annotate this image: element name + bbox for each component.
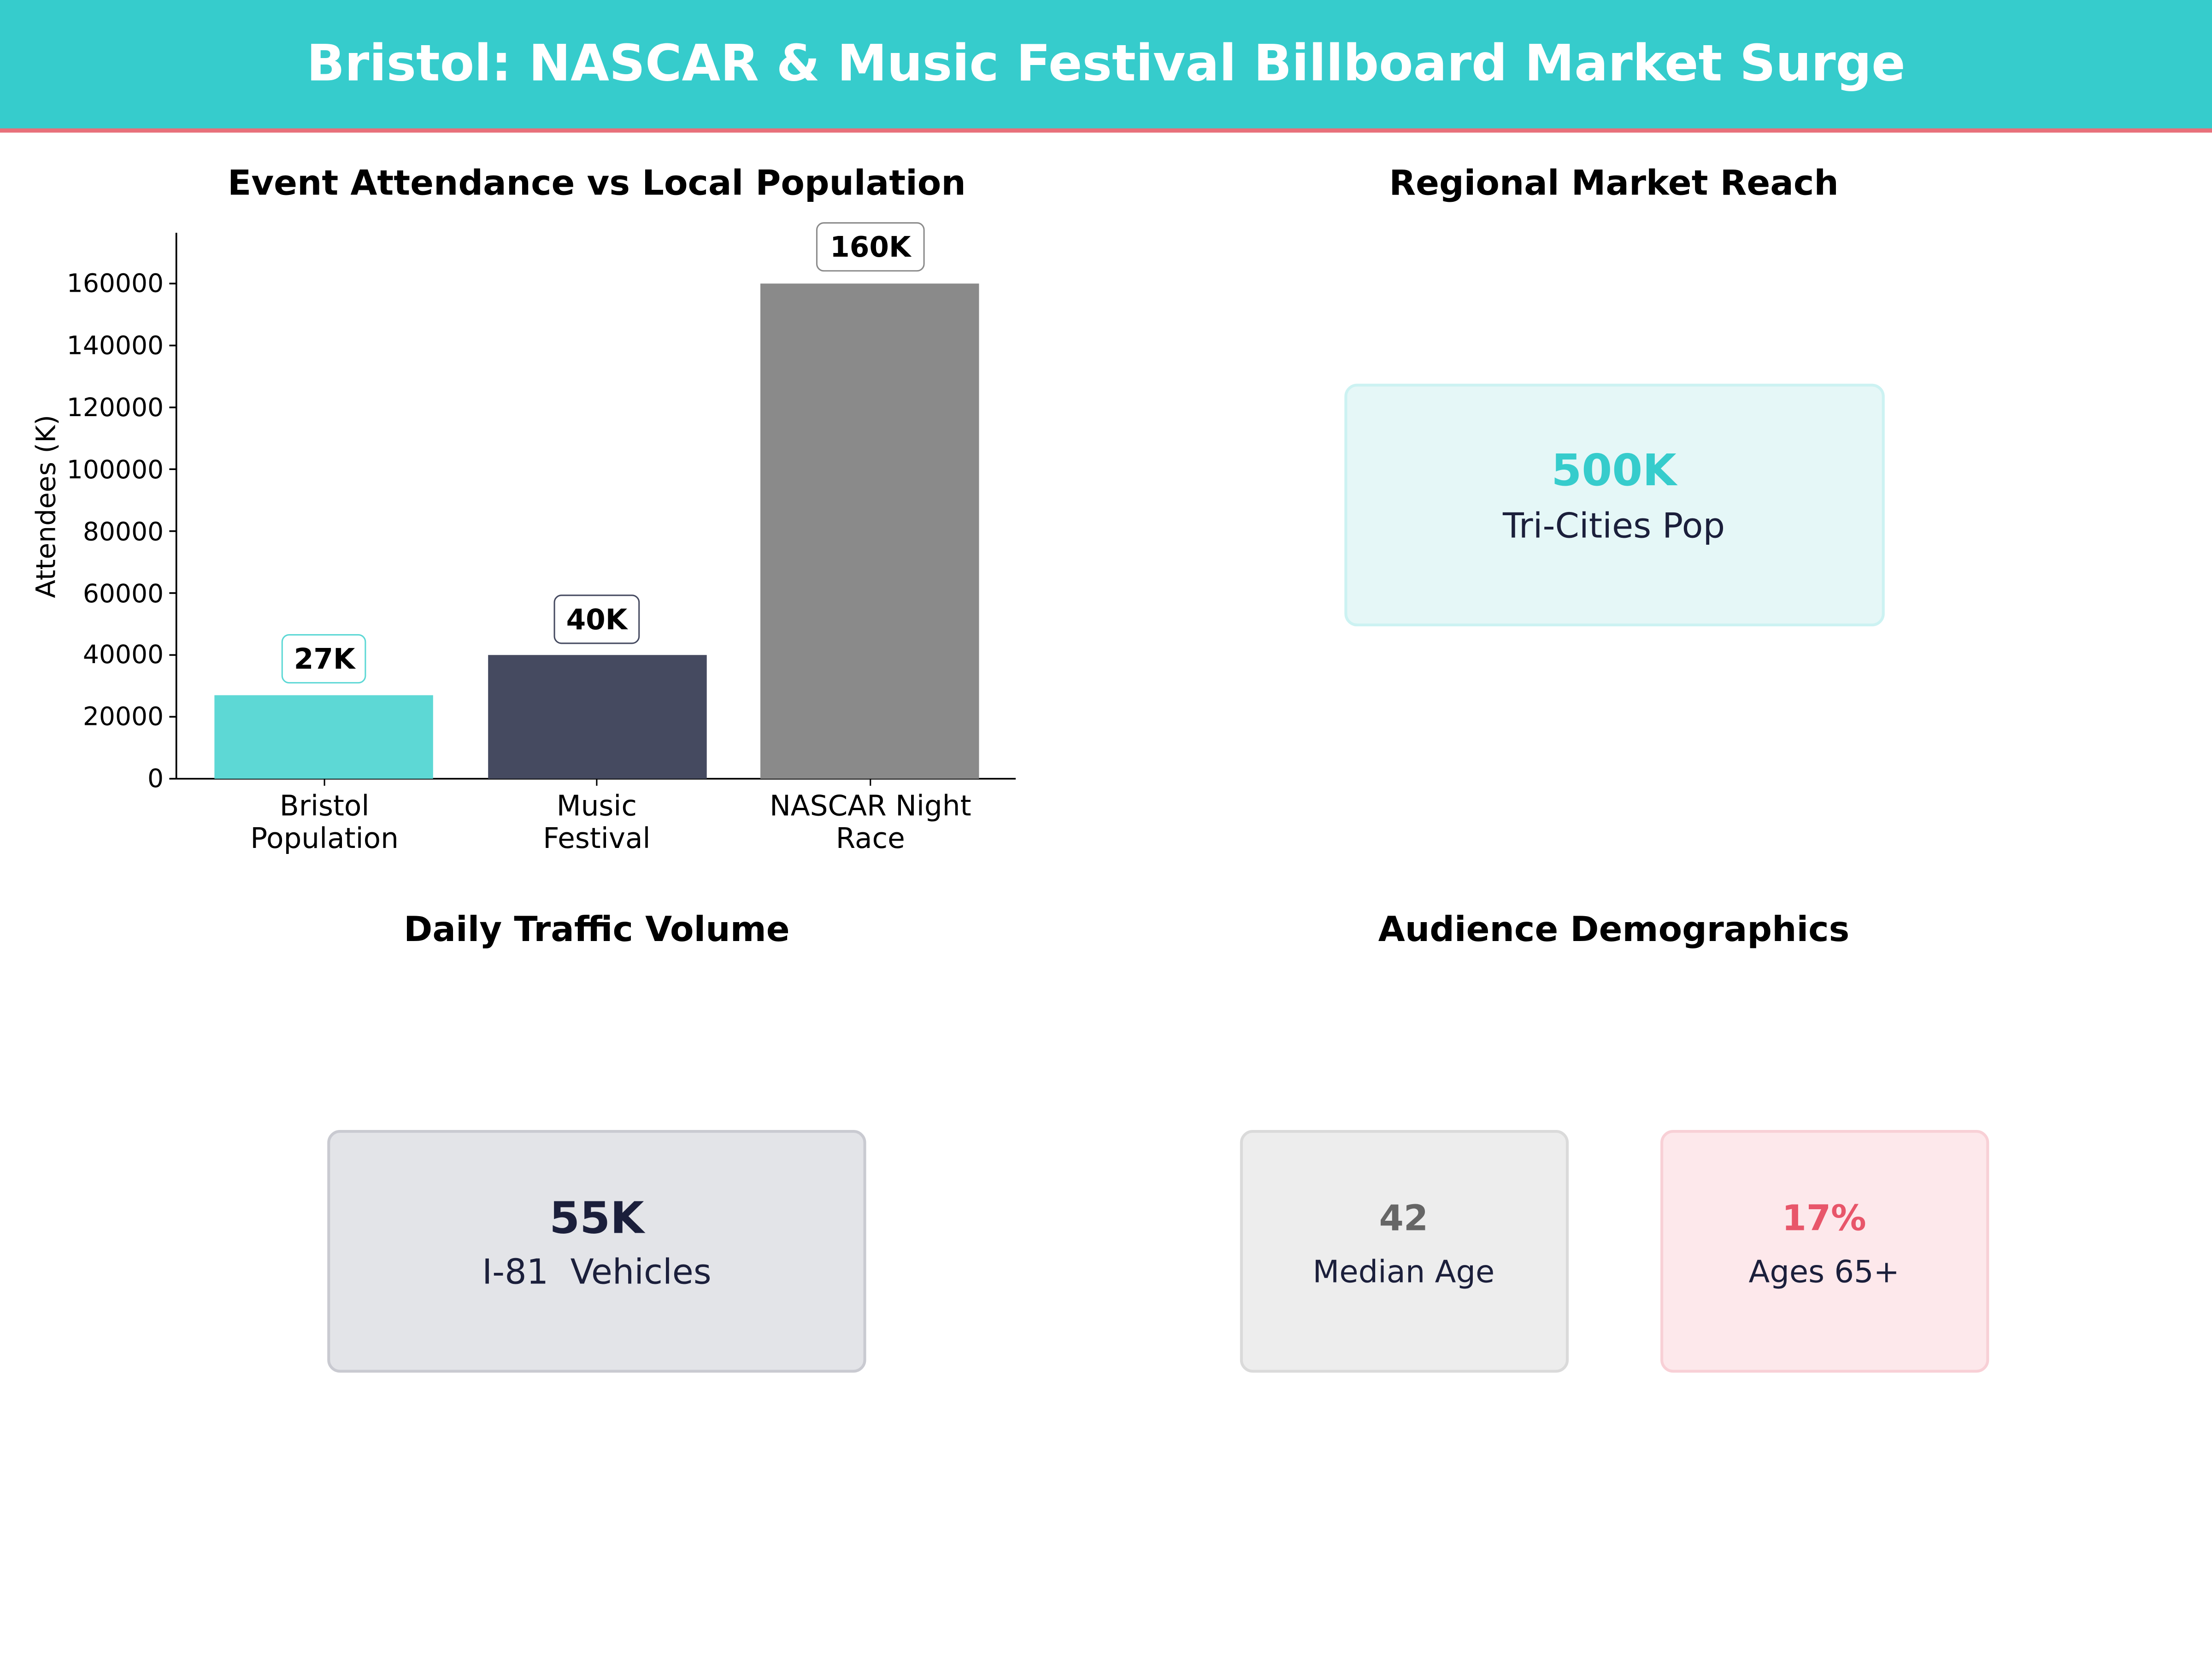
y axis (67, 233, 1016, 793)
bar: NASCAR night race: 160K (830, 231, 912, 264)
bar: Bristol population (214, 635, 433, 779)
y axis: 20000 (83, 701, 164, 731)
y axis: 0 (147, 764, 164, 793)
y axis: 60000 (83, 579, 164, 608)
stat card: ages 65+: 17% (1782, 1198, 1866, 1239)
stat card: median age: Median Age (1313, 1254, 1494, 1290)
panel: regional market reach (1346, 162, 1883, 625)
bar: Bristol population: 27K (294, 643, 356, 676)
stat card: median age (1241, 1131, 1567, 1371)
stat card: ages 65+: Ages 65+ (1748, 1254, 1900, 1290)
y axis label: Attendees (K) (30, 415, 61, 598)
panel: audience demographics: Audience Demographics (1378, 909, 1849, 949)
x labels (250, 779, 971, 855)
x labels: Race (836, 822, 905, 855)
panel: daily traffic volume (329, 909, 865, 1371)
y axis: 100000 (67, 455, 164, 484)
y axis: 140000 (67, 330, 164, 360)
bar: music festival: 40K (566, 603, 629, 636)
stat card: I-81 (329, 1131, 865, 1371)
panel: daily traffic volume: Daily Traffic Volume (404, 909, 790, 949)
y axis: 40000 (83, 640, 164, 669)
title: Bristol: NASCAR & Music Festival Billboard Market Surge (306, 34, 1906, 92)
panel: event attendance bar chart (30, 162, 1016, 855)
header banner (0, 0, 2212, 133)
x labels: Population (250, 822, 399, 855)
stat card: I-81: I-81 Vehicles (482, 1252, 712, 1292)
stat card: Tri-Cities: 500K (1551, 445, 1678, 496)
x labels: NASCAR Night (770, 789, 971, 822)
x labels: Festival (543, 822, 650, 855)
stat card: Tri-Cities (1346, 385, 1883, 625)
stat card: ages 65+ (1662, 1131, 1988, 1371)
panel: audience demographics (1241, 909, 1988, 1371)
bar: NASCAR night race (760, 223, 979, 779)
stat card: median age: 42 (1379, 1198, 1428, 1239)
y axis: 160000 (67, 269, 164, 298)
stat card: I-81: 55K (549, 1193, 646, 1244)
stat card: Tri-Cities: Tri-Cities Pop (1502, 505, 1725, 546)
panel: regional market reach: Regional Market Reach (1389, 162, 1839, 203)
x labels: Music (557, 789, 637, 822)
y axis: 120000 (67, 393, 164, 422)
y axis: 80000 (83, 517, 164, 546)
x labels: Bristol (280, 789, 369, 822)
chart heading: Event Attendance vs Local Population (228, 162, 966, 203)
bar: music festival (488, 595, 707, 779)
